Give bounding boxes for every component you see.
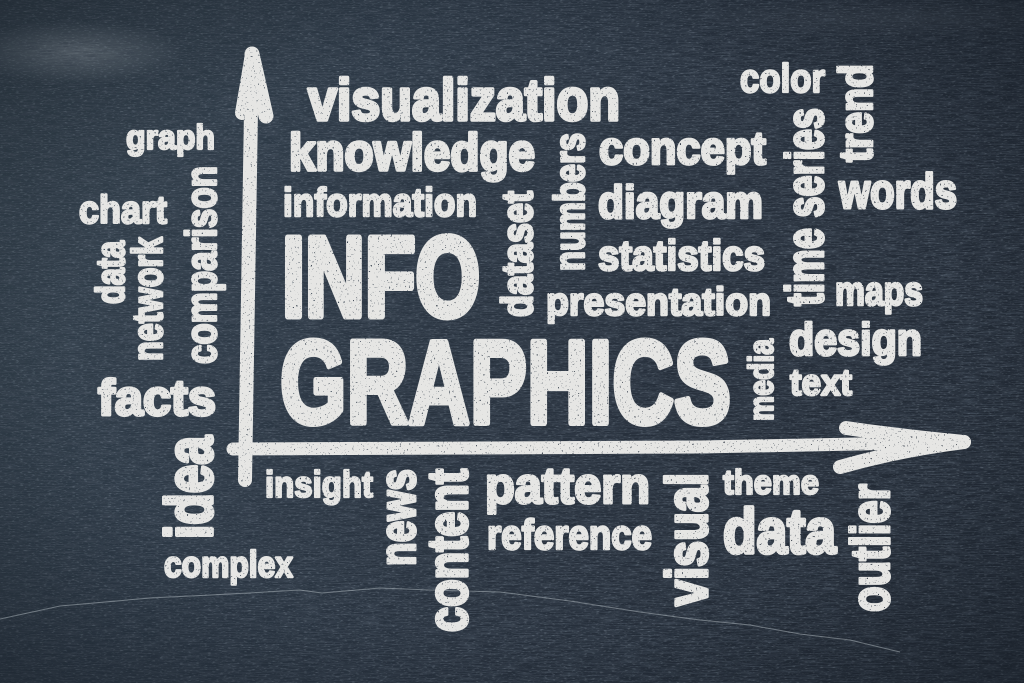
arrow: horizontal axis: [233, 428, 964, 467]
vertical word: outlier: outlier: [839, 484, 901, 612]
word: insight: insight: [265, 464, 373, 505]
word: diagram: diagram: [598, 176, 763, 228]
word: information: information: [283, 181, 477, 225]
vertical word: media: media: [742, 339, 781, 421]
vertical word: idea: idea: [152, 435, 226, 539]
vertical word: time series: time series: [776, 108, 835, 306]
word: knowledge: knowledge: [289, 124, 535, 182]
word: words: words: [838, 165, 957, 219]
title: GRAPHICS: GRAPHICS: [280, 317, 731, 449]
word: color: color: [740, 57, 825, 101]
title: INFO: INFO: [282, 214, 480, 340]
vertical word: comparison: comparison: [177, 166, 226, 364]
word: statistics: statistics: [598, 232, 765, 280]
word: chart: chart: [79, 189, 167, 232]
vertical word: data (small): data: [89, 240, 133, 304]
word: visualization: visualization: [308, 68, 620, 133]
vertical word: dataset: dataset: [493, 191, 542, 317]
word: presentation: presentation: [546, 281, 771, 324]
word: pattern: pattern: [485, 457, 650, 514]
word: data (large): data: [723, 497, 837, 567]
vertical word: news: news: [369, 469, 426, 566]
word: graph: graph: [126, 119, 215, 157]
word: maps: maps: [835, 268, 923, 314]
vertical word: visual: visual: [655, 473, 720, 606]
crack line across the board: [0, 588, 900, 652]
vertical word: numbers: numbers: [546, 133, 594, 271]
word: complex: complex: [164, 544, 293, 585]
word: theme: theme: [723, 464, 819, 502]
word: design: design: [789, 314, 922, 365]
vertical word: trend: trend: [829, 64, 882, 162]
word: concept: concept: [599, 122, 766, 174]
word: facts: facts: [98, 370, 216, 426]
word: text: text: [790, 362, 852, 403]
vertical word: network: network: [124, 237, 172, 361]
arrow: vertical axis: [242, 54, 266, 480]
word: reference: reference: [487, 511, 652, 558]
vertical word: content: content: [416, 469, 480, 632]
